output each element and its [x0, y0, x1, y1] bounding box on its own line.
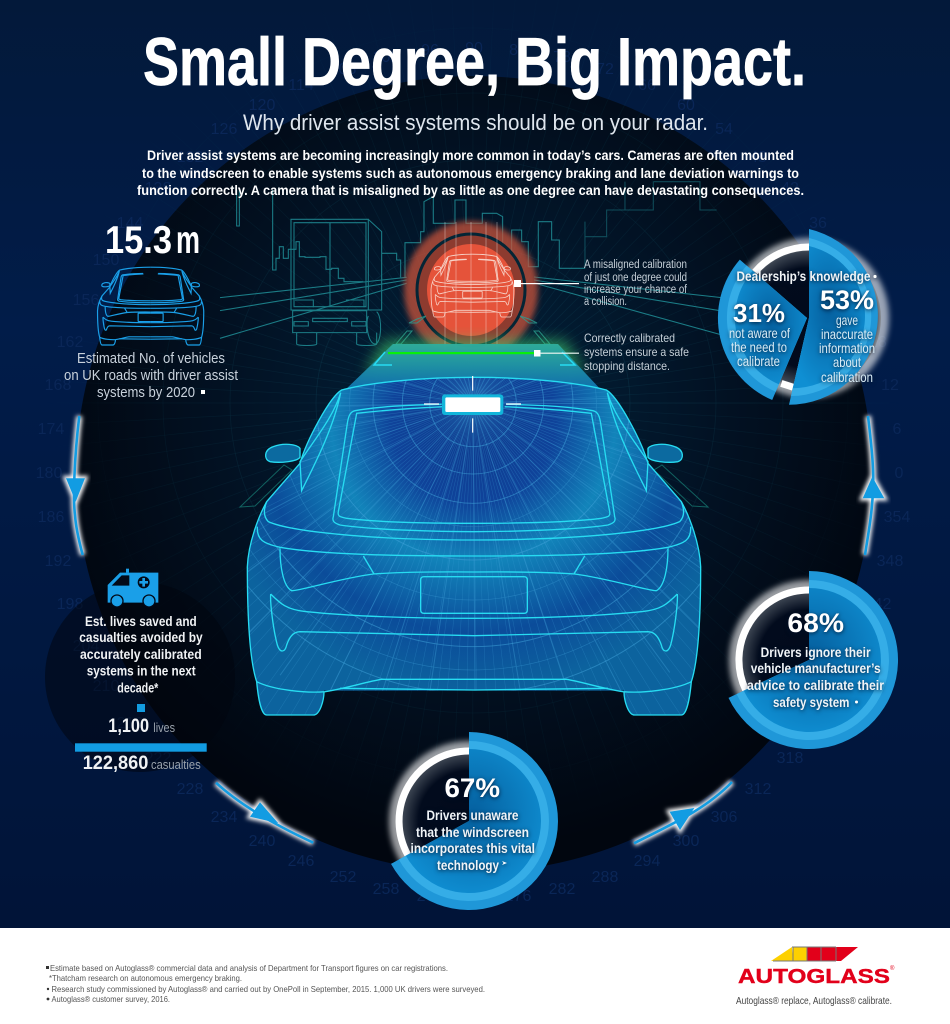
arrow: left downward: [66, 416, 85, 555]
icon: red collision warning target: [404, 221, 538, 359]
side lane markers: [240, 465, 708, 507]
arrow: bottom right: [634, 782, 732, 843]
radar degree scale: 312: [745, 781, 771, 798]
radar degree scale: 354: [884, 509, 910, 526]
radar degree scale: 234: [211, 809, 237, 826]
radar degree scale: 168: [45, 377, 71, 394]
footer panel: [0, 928, 950, 1024]
mirrors fill: [266, 444, 682, 462]
callout line: misaligned: [514, 280, 579, 287]
radar degree scale: 318: [777, 750, 803, 767]
green calibrated line: [374, 350, 579, 365]
text: 67%: 67%: [444, 773, 500, 803]
text: 67%: technology: [437, 857, 499, 873]
radar degree scale: 126: [211, 121, 237, 138]
heading: dealership's knowledge: 53%: [820, 285, 874, 315]
radar degree scale: 132: [177, 149, 203, 166]
text: 68%: safety system: [773, 694, 849, 710]
skyline and truck outlines: [220, 182, 717, 345]
text: 67%: [410, 773, 535, 873]
radar degree scale: 18: [869, 334, 887, 351]
radar degree scale: 186: [38, 509, 64, 526]
radar degree scale: 204: [73, 638, 99, 655]
road markers near target: [396, 316, 550, 344]
panel: lives saved: systems in the next: [87, 663, 196, 679]
radar degree scale: 276: [505, 888, 531, 905]
heading: dealership's knowledge: not aware of: [729, 325, 790, 341]
radar disc: [76, 76, 872, 872]
intro paragraph: [137, 148, 804, 198]
radar degree scale: 108: [330, 61, 356, 78]
logo: Autoglass: [736, 947, 895, 1007]
radar degree scale: 150: [93, 252, 119, 269]
radar degree scale: 228: [177, 781, 203, 798]
text: 67%: Drivers unaware: [426, 807, 519, 823]
radar degree scale: 192: [45, 553, 71, 570]
radar degree scale: 288: [592, 869, 618, 886]
arrow: bottom left: [216, 783, 313, 843]
logo: Autoglass: ®: [890, 965, 895, 972]
panel: lives saved: 122,860: [83, 753, 148, 774]
text: 68%: [747, 608, 884, 710]
heading: dealership's knowledge: 31%: [733, 298, 785, 328]
radar degree scale: 180: [36, 465, 62, 482]
heading: dealership's knowledge: calibration: [821, 369, 873, 385]
radar grid: [148, 78, 797, 728]
footnotes: Research study commissioned by Autoglass® and carried out by OnePoll in September, 2015. 1,000 UK drivers were surveyed.: [52, 984, 485, 994]
radar degree scale: 96: [421, 42, 439, 59]
radar degree scale: 348: [877, 553, 903, 570]
radar degree scale: 66: [638, 77, 656, 94]
text: 68%: vehicle manufacturer’s: [751, 660, 881, 676]
text: 67%: incorporates this vital: [410, 840, 535, 856]
dark panel behind lives saved: [45, 582, 235, 772]
footnotes: Estimate based on Autoglass® commercial data and analysis of Department for Transport figures on car registrations.: [50, 963, 448, 973]
radar degree scale: 30: [833, 252, 851, 269]
radar degree scale: 246: [288, 853, 314, 870]
heading: dealership's knowledge: about: [833, 354, 861, 370]
callout text: correctly calibrated: Correctly calibrated: [584, 331, 675, 345]
text: 68%: advice to calibrate their: [747, 677, 884, 693]
callout text: correctly calibrated: [584, 331, 689, 373]
camera unit: [424, 376, 521, 433]
radar degree scale: 282: [549, 881, 575, 898]
panel: dealership knowledge pie: [718, 229, 889, 405]
logo: Autoglass: Autoglass® replace, Autoglass® calibrate.: [736, 995, 892, 1007]
callout text: misaligned calibration: increase your chance of: [584, 284, 688, 296]
radar degree scale: 12: [881, 377, 899, 394]
radar degree scale: 60: [677, 97, 695, 114]
stat: 15.3m vehicles: Estimated No. of vehicles: [77, 350, 225, 367]
heading: dealership's knowledge: calibrate: [737, 353, 780, 369]
radar degree scale: 78: [553, 49, 571, 66]
radar degree scale: 144: [117, 215, 143, 232]
car outline: [247, 377, 701, 715]
intro paragraph: function correctly. A camera that is misaligned by as little as one degree can have devastating consequences.: [137, 183, 804, 198]
panel: 68% drivers: [728, 571, 898, 749]
radar degree scale: 138: [145, 180, 171, 197]
radar degree scale: 42: [781, 180, 799, 197]
callout text: misaligned calibration: of just one degree could: [584, 272, 687, 284]
radar degree scale: 174: [38, 421, 64, 438]
main car illustration: [246, 376, 702, 716]
callout text: correctly calibrated: stopping distance.: [584, 359, 670, 373]
radar degree scale: 72: [596, 61, 614, 78]
sector: 53%: [789, 229, 878, 405]
icon: blue car: [98, 267, 204, 345]
bar: casualties: [75, 743, 207, 752]
radar degree scale: 162: [57, 334, 83, 351]
radar degree scale: 324: [805, 715, 831, 732]
callout text: misaligned calibration: [584, 259, 688, 308]
stat: 15.3m vehicles: on UK roads with driver assist: [64, 367, 239, 384]
text: 68%: Drivers ignore their: [761, 644, 871, 660]
logo: Autoglass: AUTOGLASS: [738, 966, 890, 988]
radar degree scale: 240: [249, 833, 275, 850]
radar degree scale: 330: [829, 678, 855, 695]
radar degree scale: [36, 40, 910, 907]
radar degree scale: 222: [145, 750, 171, 767]
panel: lives saved: lives: [153, 720, 175, 735]
heading: dealership's knowledge: information: [819, 340, 875, 356]
radar degree scale: 120: [249, 97, 275, 114]
radar degree scale: 24: [853, 292, 871, 309]
stat: 15.3m vehicles: m: [176, 219, 200, 262]
panel: lives saved: casualties avoided by: [79, 629, 203, 645]
panel: 67% drivers: [389, 732, 558, 910]
heading: dealership's knowledge: inaccurate: [821, 326, 873, 342]
stat: 15.3m vehicles: 15.3: [105, 219, 172, 262]
footnotes: *Thatcham research on autonomous emergency braking.: [49, 973, 242, 983]
green safe distance glow: [365, 340, 585, 372]
panel: lives saved: casualties: [151, 757, 201, 772]
intro paragraph: Driver assist systems are becoming increasingly more common in today’s cars. Cameras are often mounted: [147, 148, 794, 163]
heading: dealership's knowledge: Dealership’s knowledge: [736, 268, 871, 284]
text: 67%: that the windscreen: [416, 824, 529, 840]
radar degree scale: 48: [749, 149, 767, 166]
heading: dealership's knowledge: the need to: [731, 339, 787, 355]
windscreen projection: [343, 344, 603, 392]
radar degree scale: 336: [849, 638, 875, 655]
panel: lives saved: Est. lives saved and: [85, 613, 197, 629]
stat: 15.3m vehicles: systems by 2020: [97, 384, 195, 401]
arrow: right upward: [863, 416, 884, 555]
radar degree scale: 294: [634, 853, 660, 870]
footnotes: Autoglass® customer survey, 2016.: [52, 994, 170, 1004]
radar degree scale: 0: [895, 465, 904, 482]
radar degree scale: 270: [461, 890, 487, 907]
radar degree scale: 84: [509, 42, 527, 59]
radar degree scale: 6: [893, 421, 902, 438]
radar degree scale: 300: [673, 833, 699, 850]
radar degree scale: 102: [373, 49, 399, 66]
radar degree scale: 306: [711, 809, 737, 826]
callout text: correctly calibrated: systems ensure a safe: [584, 345, 689, 359]
icon: ambulance: [108, 569, 158, 608]
radar degree scale: 342: [865, 596, 891, 613]
text: 68%: 68%: [787, 608, 844, 638]
footnotes: [46, 963, 485, 1004]
radar degree scale: 54: [715, 121, 733, 138]
sector: 31%: [718, 260, 807, 400]
car grid: [248, 378, 700, 714]
radar degree scale: 90: [465, 40, 483, 57]
panel: lives saved: accurately calibrated: [80, 646, 202, 662]
radar degree scale: 252: [330, 869, 356, 886]
subtitle: Why driver assist systems should be on your radar.: [243, 110, 708, 135]
radar degree scale: 198: [57, 596, 83, 613]
radar degree scale: 210: [93, 678, 119, 695]
icon: car inside target: [431, 254, 514, 317]
radar degree scale: 156: [73, 292, 99, 309]
car body fill: [247, 377, 701, 715]
perspective lines to dealership pie: [534, 277, 728, 335]
panel: lives saved: [75, 569, 207, 774]
radar degree scale: 264: [417, 888, 443, 905]
intro paragraph: to the windscreen to enable systems such as autonomous emergency braking and lane deviation warnings to: [142, 166, 799, 181]
radar degree scale: 36: [809, 215, 827, 232]
heading: dealership's knowledge: gave: [836, 312, 858, 328]
panel: lives saved: decade*: [117, 680, 159, 696]
callout text: misaligned calibration: A misaligned calibration: [584, 259, 687, 271]
radar degree scale: 216: [117, 715, 143, 732]
bar: lives: [137, 704, 145, 712]
stat: 15.3m vehicles: [64, 219, 239, 401]
radar degree scale: 114: [288, 77, 314, 94]
callout text: misaligned calibration: a collision.: [584, 296, 627, 308]
panel: lives saved: 1,100: [108, 716, 149, 737]
heading: dealership's knowledge: [729, 268, 877, 385]
radar degree scale: 258: [373, 881, 399, 898]
